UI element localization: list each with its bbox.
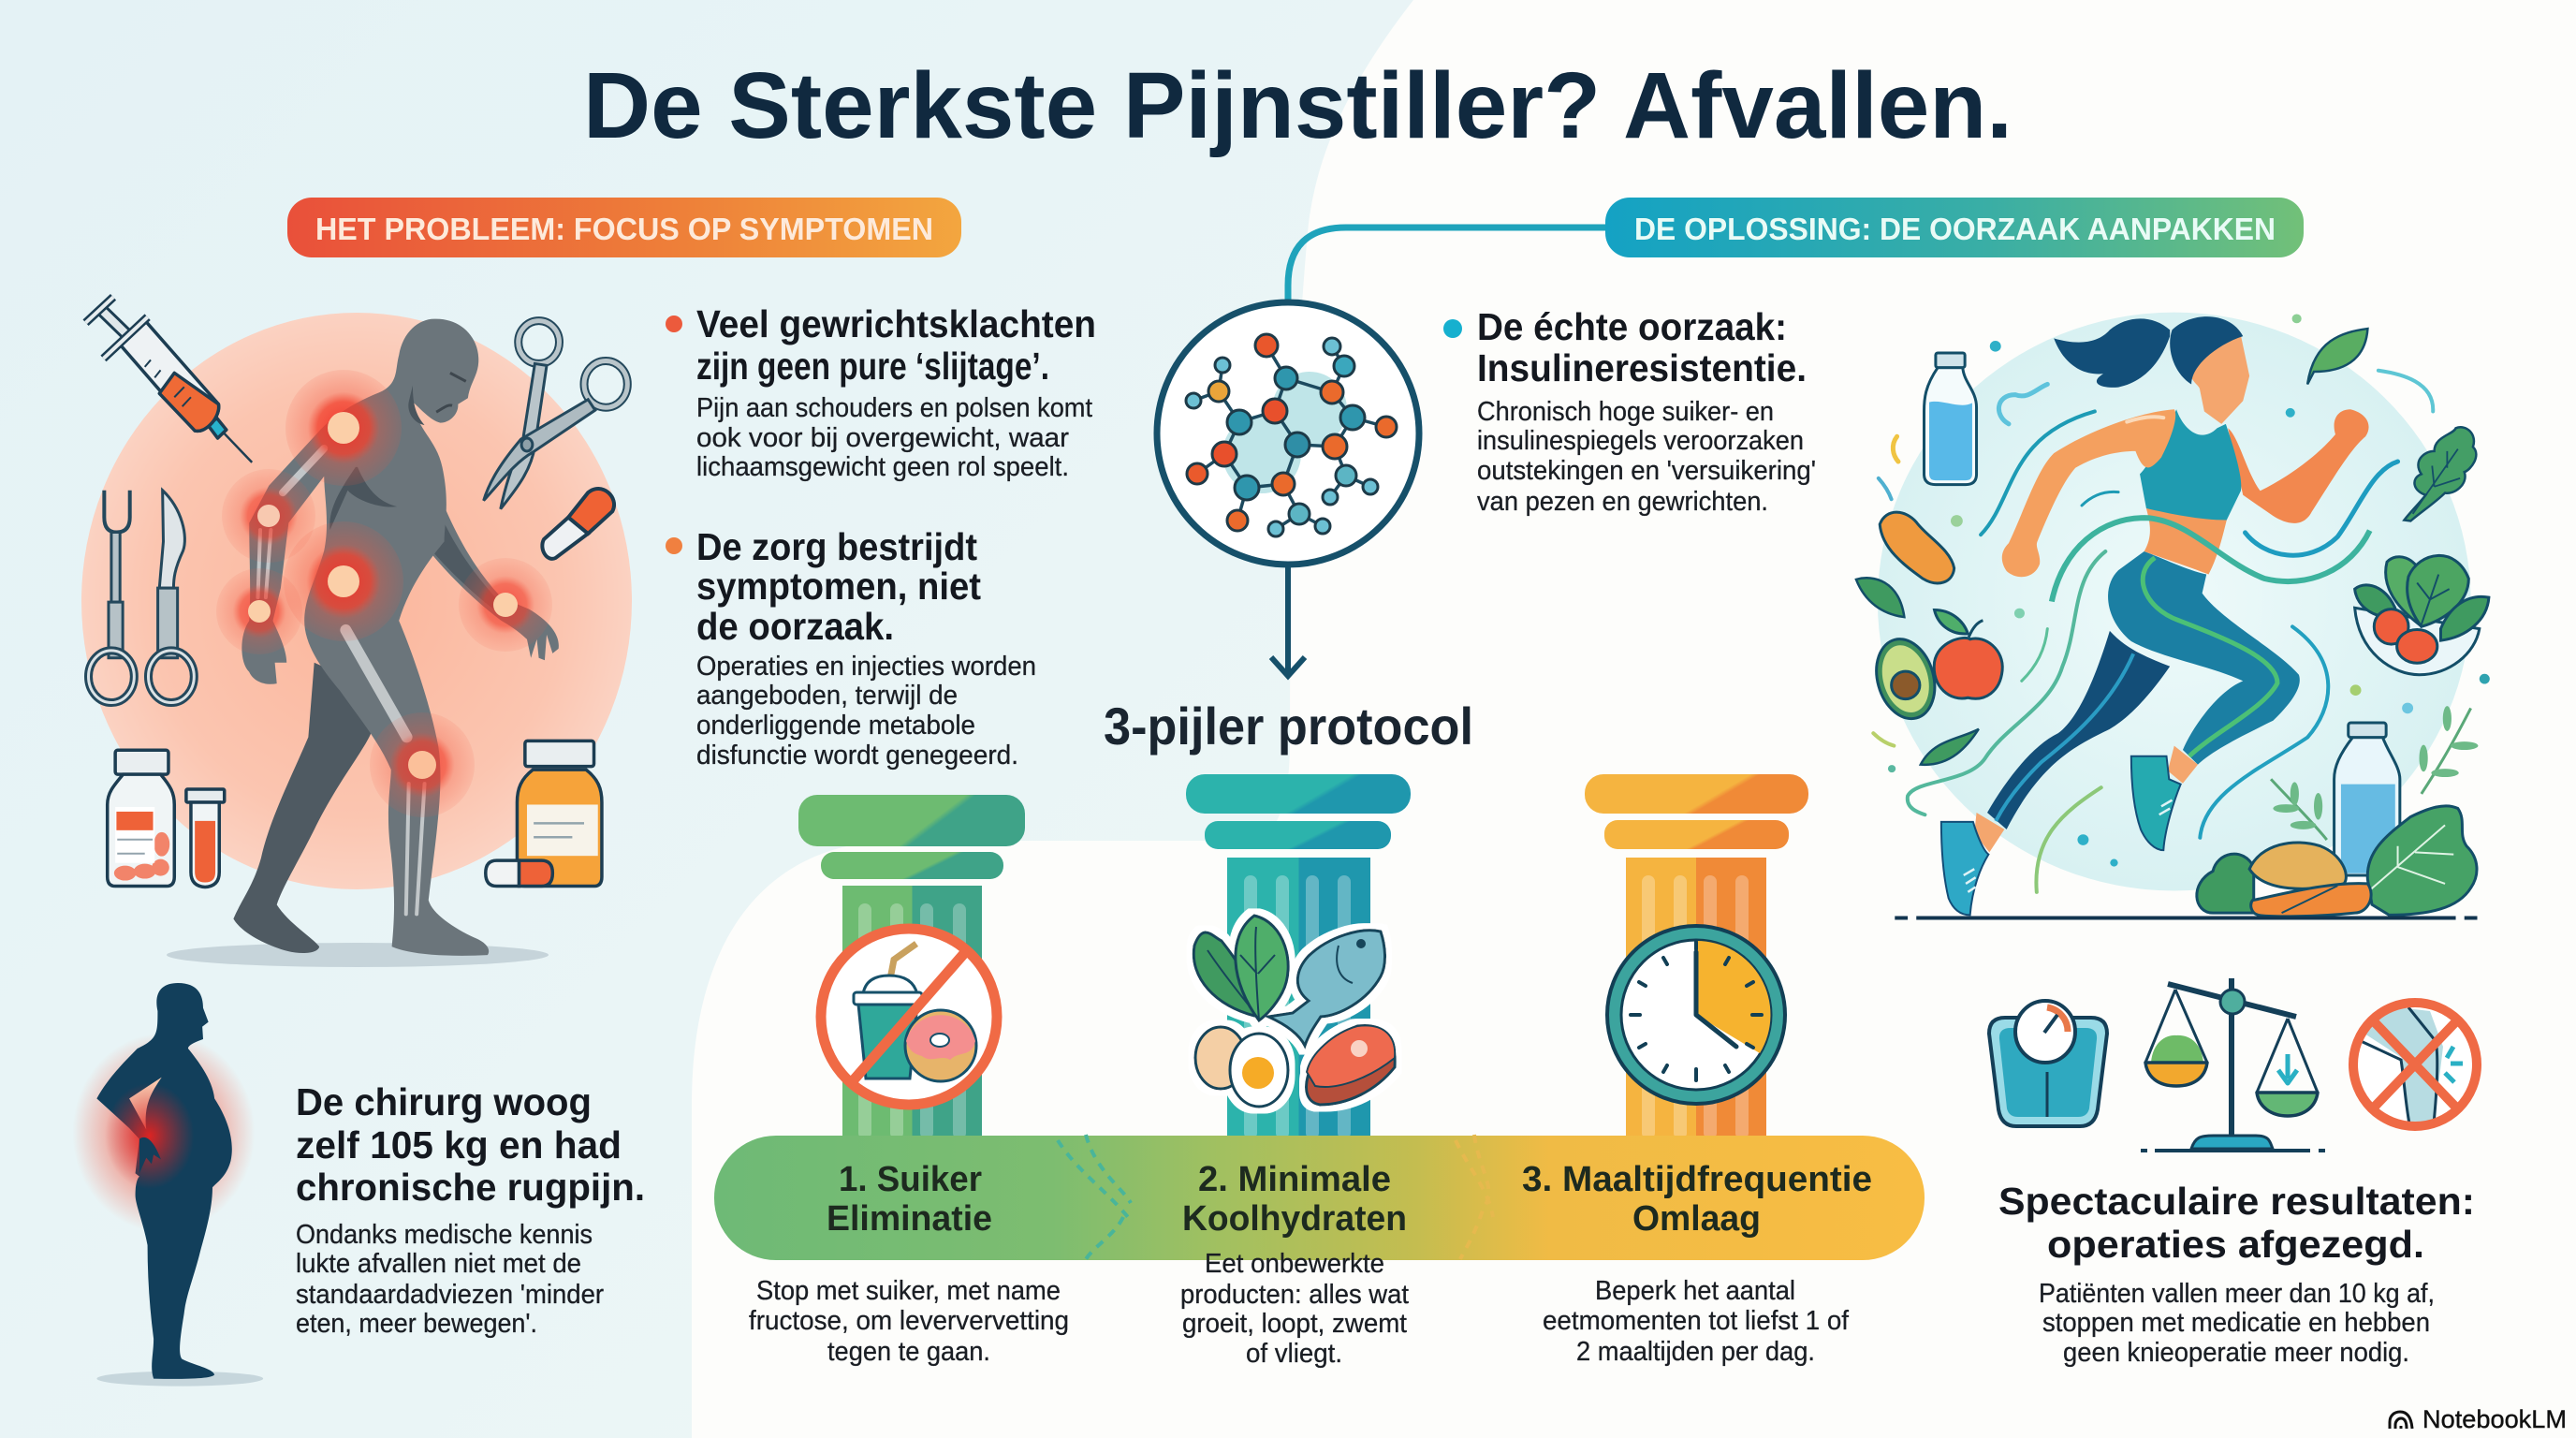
ponytail xyxy=(2054,318,2170,388)
pillar description 3 xyxy=(1543,1276,1850,1367)
near arm xyxy=(2002,409,2175,577)
pillar description 2: producten: alles wat xyxy=(1180,1280,1409,1310)
illustration: healthy runner with foods xyxy=(1856,313,2490,917)
pillar description 1: fructose, om leververvetting xyxy=(749,1306,1069,1336)
icon: balance xyxy=(2141,978,2325,1151)
pillar description 2 xyxy=(1180,1249,1409,1369)
text block: zorg bestrijdt symptomen: aangeboden, terwijl de xyxy=(696,681,958,711)
pillar 2 xyxy=(1186,774,1411,1140)
illustration: overweight surgeon silhouette with back pain xyxy=(72,983,263,1387)
text block: chirurg xyxy=(296,1080,645,1339)
pillar label 3: 3. Maaltijdfrequentie xyxy=(1522,1160,1872,1199)
spinach leaf xyxy=(1193,916,1288,1020)
peach background circle xyxy=(81,313,632,889)
text block: echte oorzaak: outstekingen en 'versuikering' xyxy=(1477,456,1816,486)
text block: slijtage: Veel gewrichtsklachten xyxy=(696,302,1096,345)
motion swooshes behind xyxy=(1873,371,2433,892)
pillar description 1 xyxy=(749,1276,1069,1367)
icon: pill bottle and test tube xyxy=(108,750,225,888)
pillar label 2: Koolhydraten xyxy=(1182,1199,1407,1239)
pillar label 3: Omlaag xyxy=(1632,1199,1761,1239)
text block: echte oorzaak: insulinespiegels veroorzaken xyxy=(1477,426,1804,456)
ground line xyxy=(1895,916,2478,919)
text block: zorg bestrijdt symptomen: de oorzaak. xyxy=(696,605,894,648)
text block: zorg bestrijdt symptomen: onderliggende metabole xyxy=(696,711,975,741)
icon: whole foods xyxy=(1193,916,1395,1107)
icon: scalpel xyxy=(148,491,194,703)
heading: 3-pijler protocol: 3-pijler protocol xyxy=(1104,697,1473,756)
text block: resultaten: operaties afgezegd. xyxy=(2047,1223,2424,1266)
icon: water bottle xyxy=(1925,353,1977,485)
text block: slijtage: ook voor bij overgewicht, waar xyxy=(696,423,1069,453)
base band xyxy=(714,1135,1925,1260)
pillar description 2: Eet onbewerkte xyxy=(1205,1249,1384,1279)
pill: de oplossing xyxy=(1605,198,2304,257)
NotebookLM logo: NotebookLM xyxy=(2422,1405,2567,1433)
pain points xyxy=(216,370,552,817)
icon: bathroom scale xyxy=(1989,1001,2107,1126)
pillar label 1 xyxy=(827,1160,992,1239)
aqua background circle xyxy=(1878,313,2471,890)
pillar label 2 xyxy=(1182,1160,1407,1239)
pillar description 1: tegen te gaan. xyxy=(827,1337,990,1367)
eggs xyxy=(1195,1027,1246,1089)
ground shadow xyxy=(167,943,549,967)
walking figure xyxy=(233,319,559,956)
connector from solution pill to molecule xyxy=(1288,227,1610,303)
head xyxy=(2189,335,2249,424)
arrow: molecule to protocol xyxy=(1271,565,1305,676)
icon: orange medicine bottle xyxy=(486,741,602,887)
text block: echte oorzaak: Chronisch hoge suiker- en xyxy=(1477,397,1774,427)
icon: retractor xyxy=(89,491,134,703)
text block: slijtage: lichaamsgewicht geen rol speelt. xyxy=(696,452,1069,482)
text block: zorg bestrijdt symptomen: Operaties en injecties worden xyxy=(696,652,1036,682)
icon: kale leaf xyxy=(2404,427,2476,521)
pillar description 3: eetmomenten tot liefst 1 of xyxy=(1543,1306,1850,1336)
pillar description 2: of vliegt. xyxy=(1246,1339,1342,1369)
steak xyxy=(1307,1025,1395,1105)
back foot xyxy=(1974,813,2004,852)
pillar description 2: groeit, loopt, zwemt xyxy=(1182,1309,1407,1339)
midriff xyxy=(2144,508,2227,575)
fish xyxy=(1268,931,1385,1046)
icon: syringe xyxy=(86,297,252,462)
text block: zorg bestrijdt symptomen: symptomen, niet xyxy=(696,565,981,608)
text block: chirurg: Ondanks medische kennis xyxy=(296,1220,593,1250)
text block: echte oorzaak xyxy=(1443,305,1816,517)
icon: no knee surgery xyxy=(2349,999,2481,1130)
pillar description 3: 2 maaltijden per dag. xyxy=(1576,1337,1815,1367)
icon: clock xyxy=(1607,926,1785,1104)
front foot xyxy=(2168,746,2198,784)
sprigs xyxy=(2271,708,2471,840)
text block: zorg bestrijdt symptomen: De zorg bestrijdt xyxy=(696,525,977,568)
text block: chirurg: De chirurg woog xyxy=(296,1080,592,1123)
text block: resultaten: Patiënten vallen meer dan 10 kg af, xyxy=(2039,1279,2435,1309)
text block: resultaten: Spectaculaire resultaten: xyxy=(1998,1180,2475,1223)
pill: het probleem xyxy=(287,198,961,257)
text block: resultaten: stoppen met medicatie en hebben xyxy=(2042,1308,2430,1338)
icon: side leaves xyxy=(1856,329,2367,765)
icon: avocado and apple xyxy=(1867,609,2002,725)
icon: sweet potato xyxy=(1880,512,1954,583)
pillar 3 xyxy=(1585,774,1808,1140)
leggings xyxy=(2108,551,2300,765)
text block: chirurg: chronische rugpijn. xyxy=(296,1166,645,1209)
crop top xyxy=(2140,409,2241,521)
text block: chirurg: standaardadviezen 'minder xyxy=(296,1280,604,1310)
text block: resultaten: geen knieoperatie meer nodig. xyxy=(2063,1338,2409,1368)
icon: capsule xyxy=(542,489,614,559)
back leg xyxy=(1987,631,2170,829)
pillar description 1: Stop met suiker, met name xyxy=(756,1276,1061,1306)
far arm xyxy=(2228,409,2369,523)
text block: echte oorzaak: van pezen en gewrichten. xyxy=(1477,487,1768,517)
text block: echte oorzaak: De échte oorzaak: xyxy=(1477,305,1787,348)
text block: chirurg: lukte afvallen niet met de xyxy=(296,1249,581,1279)
dots xyxy=(1888,314,2490,867)
text block: slijtage: Pijn aan schouders en polsen komt xyxy=(696,393,1092,423)
front ribbon xyxy=(2052,518,2370,602)
pillar description 3: Beperk het aantal xyxy=(1595,1276,1795,1306)
pillar label 1: Eliminatie xyxy=(827,1199,992,1239)
pillar 1 xyxy=(798,795,1025,1140)
text block: resultaten xyxy=(1998,1180,2475,1368)
pillar label 3 xyxy=(1522,1160,1872,1239)
icon: no sugar xyxy=(817,925,1001,1108)
text block: echte oorzaak: Insulineresistentie. xyxy=(1477,346,1807,389)
text block: zorg bestrijdt symptomen xyxy=(666,525,1036,770)
pill: het probleem: HET PROBLEEM: FOCUS OP SYMPTOMEN xyxy=(315,212,933,246)
pillar label 2: 2. Minimale xyxy=(1198,1160,1391,1199)
text block: chirurg: zelf 105 kg en had xyxy=(296,1123,622,1167)
text block: zorg bestrijdt symptomen: disfunctie wordt genegeerd. xyxy=(696,741,1018,770)
text block: slijtage: zijn geen pure ‘slijtage’. xyxy=(696,345,1049,388)
icon: molecule in circle xyxy=(1157,302,1419,565)
pillar label 1: 1. Suiker xyxy=(839,1160,982,1199)
illustration: man with joint pain and medical tools xyxy=(81,297,632,967)
pill: de oplossing: DE OPLOSSING: DE OORZAAK AANPAKKEN xyxy=(1634,212,2276,246)
text block: chirurg: eten, meer bewegen'. xyxy=(296,1309,537,1339)
icon: surgical scissors xyxy=(484,321,627,509)
title: De Sterkste Pijnstiller? Afvallen. xyxy=(583,53,2012,158)
icon: bottle and vegetables xyxy=(2197,723,2477,917)
text block: slijtage xyxy=(666,302,1096,482)
icon: salad bowl xyxy=(2355,555,2489,675)
